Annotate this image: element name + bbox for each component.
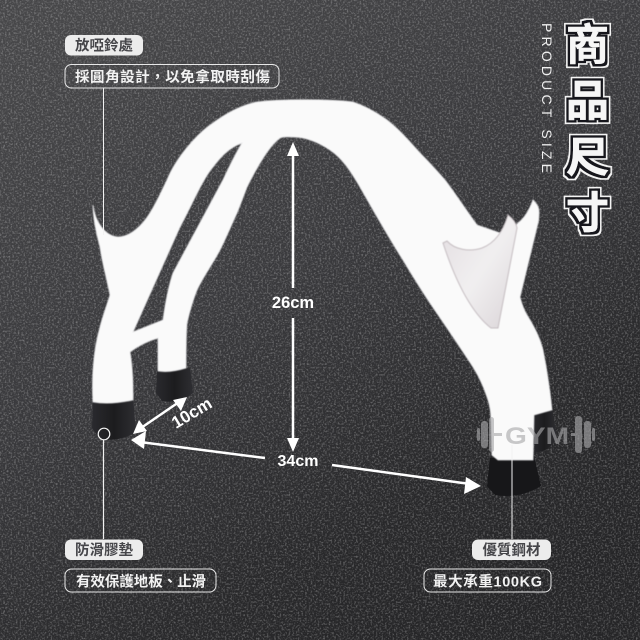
arrow: depth 10cm [133, 397, 187, 434]
callout: 放啞鈴處: 放啞鈴處 [75, 36, 134, 54]
arrow: width 34cm [131, 431, 481, 494]
heading: 商品尺寸: 尺 [566, 134, 609, 182]
callout: 有效保護地板: 有效保護地板、止滑 [76, 572, 206, 590]
watermark: GYM dumbbell logo: GYM [505, 423, 569, 450]
callout: 防滑膠墊: 防滑膠墊 [75, 541, 134, 559]
label: 10cm: 10cm [168, 394, 215, 432]
callout: 有效保護地板 [65, 569, 216, 592]
grey inset triangle [443, 215, 517, 328]
leader line: steel [511, 445, 513, 539]
callout: 採圓角設計 [65, 64, 279, 88]
heading: 商品尺寸 [566, 22, 609, 238]
callout: 放啞鈴處 [65, 35, 143, 56]
callout: 防滑膠墊 [65, 540, 143, 560]
heading: 商品尺寸: 商 [566, 22, 609, 70]
watermark: GYM dumbbell logo [477, 416, 595, 453]
callout: 優質鋼材 [472, 540, 551, 560]
label: 34cm: 34cm [278, 453, 318, 470]
arrow: height 26cm [287, 142, 299, 452]
label: 26cm: 26cm [272, 294, 314, 312]
heading: 商品尺寸: 寸 [566, 190, 609, 238]
callout: 最大承重100KG: 最大承重100KG [433, 574, 542, 590]
callout: 優質鋼材: 優質鋼材 [482, 541, 541, 559]
callout: 採圓角設計: 採圓角設計，以免拿取時刮傷 [75, 68, 270, 86]
white frame [93, 100, 552, 460]
subheading: PRODUCT SIZE: PRODUCT SIZE [539, 23, 555, 173]
leader line and marker: rubber foot [98, 428, 110, 539]
heading: 商品尺寸: 品 [566, 78, 609, 126]
product: white dumbbell bar stand [92, 100, 557, 496]
rubber foot caps [92, 368, 557, 496]
leader line: top callout [102, 88, 104, 235]
callout: 最大承重100KG [424, 569, 551, 592]
